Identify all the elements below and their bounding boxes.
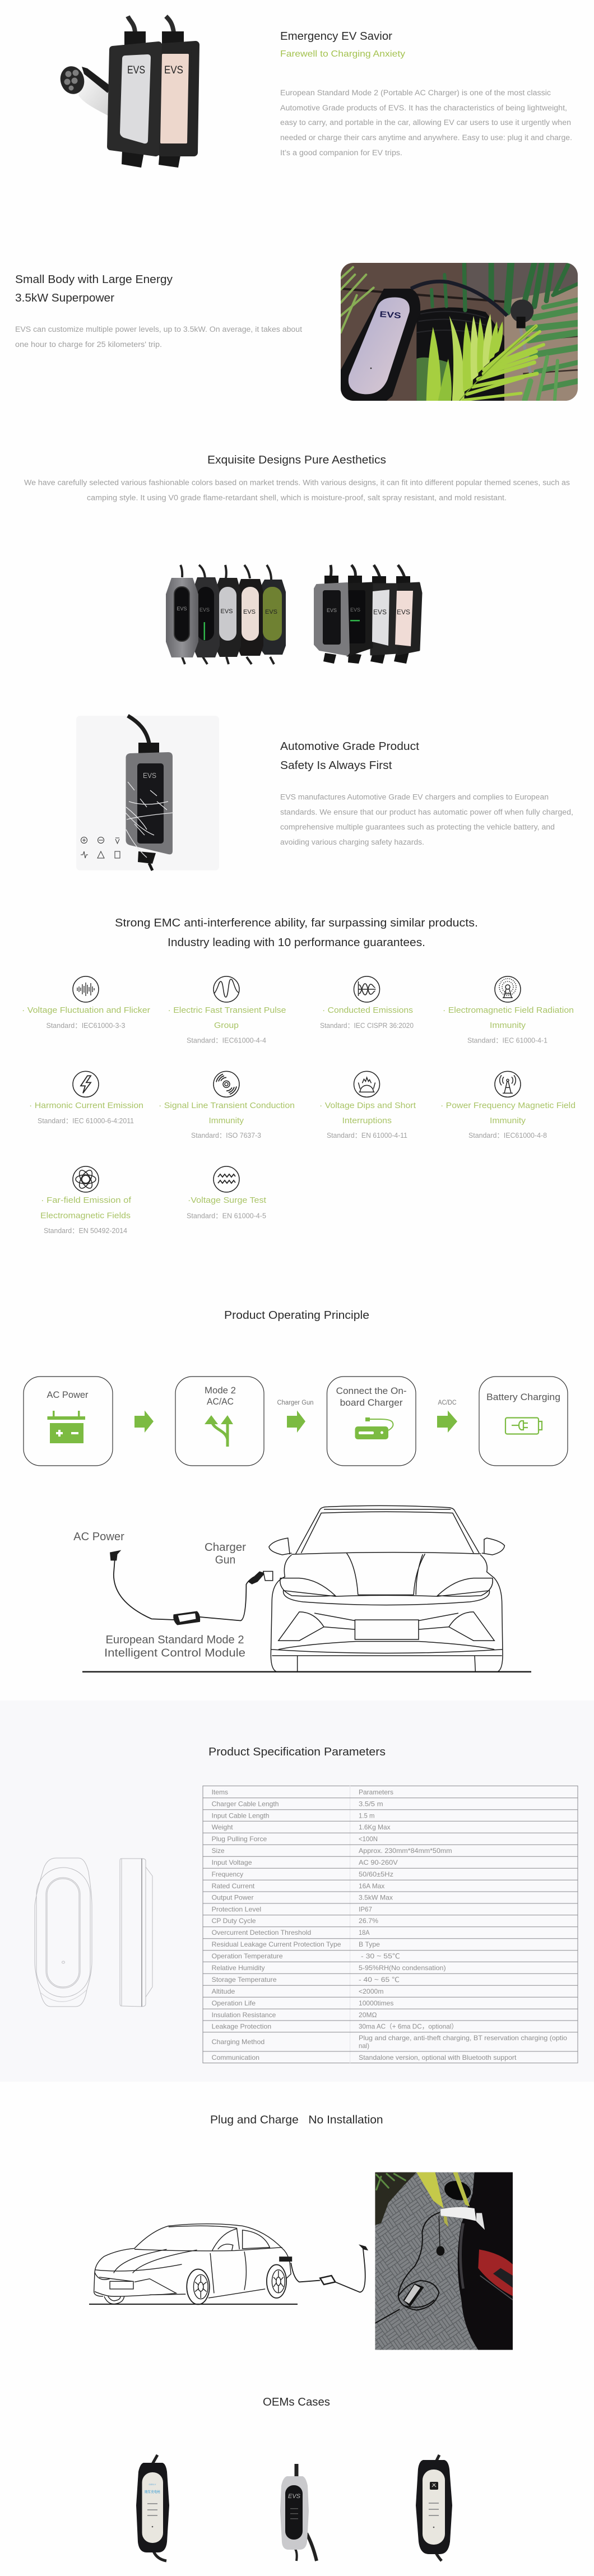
panel: OEMs cases <box>136 2396 452 2561</box>
arrow <box>437 1410 457 1433</box>
heading: OEMs Cases <box>263 2396 330 2408</box>
heading <box>15 274 173 304</box>
heading: Exquisite Designs Pure Aesthetics <box>207 454 386 466</box>
paragraph: standards. We ensure that our product has automatic power off when fully charged, <box>280 808 573 816</box>
table: specifications: 1.6Kg Max <box>359 1823 390 1831</box>
step: connect the on-board charger: board Charger <box>340 1398 403 1408</box>
image: two portable chargers with plug <box>57 16 196 168</box>
guarantee: signal line <box>159 1071 295 1139</box>
table: specifications: 10000times <box>359 1999 393 2007</box>
step: mode 2 <box>175 1377 264 1466</box>
table: specifications: <2000m <box>359 1987 383 1995</box>
image: four rectangular-panel chargers <box>314 565 421 664</box>
title line two: Immunity <box>490 1021 526 1030</box>
icon: split arrows <box>205 1415 233 1447</box>
heading: 3.5kW Superpower <box>15 292 114 304</box>
standard: Standard：EN 61000-4-5 <box>187 1212 266 1220</box>
step: mode 2: Mode 2 <box>205 1386 236 1396</box>
photo: charger among palm leaves: EVS <box>379 310 402 321</box>
table: specifications: 5-95%RH(No condensation) <box>359 1964 446 1972</box>
title line two: Immunity <box>208 1116 244 1125</box>
table: specifications: - 30 ~ 55℃ <box>361 1952 400 1960</box>
paragraph <box>280 89 572 157</box>
table: specifications: Standalone version, optional with Bluetooth support <box>359 2054 517 2061</box>
standard: Standard：IEC CISPR 36:2020 <box>320 1022 414 1030</box>
table: specifications: nal) <box>359 2042 369 2050</box>
label: control module: European Standard Mode 2 <box>105 1634 244 1646</box>
table: specifications: Approx. 230mm*84mm*50mm <box>359 1847 452 1855</box>
heading: Product Operating Principle <box>224 1309 369 1322</box>
paragraph <box>24 479 570 502</box>
icon: battery <box>47 1411 85 1443</box>
panel: small body large energy <box>15 263 578 401</box>
paragraph: needed or charge their cars anytime and anywhere. Easy to use: plug it and charge. <box>280 133 572 142</box>
table: specifications: CP Duty Cycle <box>212 1917 256 1925</box>
paragraph <box>15 325 302 349</box>
heading <box>115 917 478 949</box>
product: OEM charger silver <box>280 2464 317 2561</box>
paragraph: avoiding various charging safety hazards. <box>280 838 424 846</box>
table: specifications: <100N <box>359 1835 378 1843</box>
illustration: charging cable with control module <box>110 1550 273 1625</box>
step: battery charging: Battery Charging <box>486 1392 560 1402</box>
paragraph: It’s a good companion for EV trips. <box>280 149 402 157</box>
subheading: Farewell to Charging Anxiety <box>280 49 405 59</box>
icon: zigzag waves <box>214 1166 239 1192</box>
section background <box>0 1701 594 2082</box>
step: AC power: AC Power <box>47 1390 89 1400</box>
paragraph: comprehensive multiple guarantees such as protecting the vehicle battery, and <box>280 823 555 831</box>
drawing: charger front view <box>35 1858 92 2007</box>
icon: dome with flame <box>354 1071 380 1097</box>
heading: Small Body with Large Energy <box>15 274 173 286</box>
step: battery charging <box>479 1377 568 1466</box>
step: AC power <box>24 1377 113 1466</box>
icon: sine wave <box>214 976 239 1002</box>
label: AC power: AC Power <box>73 1531 124 1543</box>
paragraph: Automotive Grade products of EVS. It has the characteristics of being lightweight, <box>280 104 567 112</box>
table: specifications: AC 90-260V <box>359 1859 398 1866</box>
panel: EMC performance guarantees <box>22 917 576 1235</box>
standard: Standard：IEC61000-3-3 <box>46 1022 126 1030</box>
image: four rectangular-panel chargers: EVS <box>350 607 360 613</box>
table: specifications: Overcurrent Detection Threshold <box>212 1929 311 1936</box>
image: four rectangular-panel chargers: EVS <box>397 608 410 616</box>
heading: Emergency EV Savior <box>280 30 392 43</box>
panel: product operating principle <box>24 1309 568 1672</box>
product: OEM charger with logo <box>416 2455 452 2561</box>
table: specifications: Frequency <box>212 1870 243 1878</box>
step: connect the on-board charger <box>327 1377 416 1466</box>
guarantee: conducted emissions <box>320 976 414 1030</box>
table: specifications: Leakage Protection <box>212 2022 271 2030</box>
standard: Standard：IEC 61000-4-1 <box>467 1037 547 1045</box>
title: · Voltage Fluctuation and Flicker <box>22 1006 150 1015</box>
guarantee: harmonic current <box>29 1071 143 1125</box>
title line two: Immunity <box>490 1116 526 1125</box>
icon: antenna tower <box>495 1071 521 1097</box>
title: · Electromagnetic Field Radiation <box>443 1006 574 1015</box>
label: charger gun: Charger <box>205 1541 246 1554</box>
table: specifications: Plug and charge, anti-theft charging, BT reservation charging (optio <box>359 2034 567 2042</box>
table: specifications: Operation Life <box>212 1999 256 2007</box>
label: charger gun <box>205 1541 246 1566</box>
guarantee: power frequency <box>440 1071 576 1139</box>
table: specifications: Charging Method <box>212 2038 264 2046</box>
table: specifications: Insulation Resistance <box>212 2011 276 2019</box>
heading: Product Specification Parameters <box>208 1746 386 1758</box>
paragraph <box>280 793 573 846</box>
guarantee: field radiation immunity <box>443 976 574 1045</box>
title: · Conducted Emissions <box>322 1006 413 1015</box>
title: · Power Frequency Magnetic Field <box>440 1101 576 1110</box>
table: specifications: 16A Max <box>359 1882 384 1890</box>
standard: Standard：EN 50492-2014 <box>44 1227 127 1235</box>
ground line <box>82 1671 531 1672</box>
paragraph: easy to carry, and portable in the car, allowing EV car users to use it urgently when <box>280 118 571 127</box>
panel: automotive grade product <box>76 716 573 870</box>
table: specifications: Plug Pulling Force <box>212 1835 267 1843</box>
label: charger gun: Charger Gun <box>277 1400 314 1406</box>
table: specifications: B Type <box>359 1940 380 1948</box>
table: specifications: Weight <box>212 1823 233 1831</box>
arrow <box>134 1410 154 1433</box>
table: specifications: Protection Level <box>212 1906 261 1914</box>
title line two: Group <box>214 1021 239 1030</box>
title: · Harmonic Current Emission <box>29 1101 143 1110</box>
panel: product specification parameters <box>0 1701 594 2082</box>
guarantee: voltage fluctuation <box>22 976 150 1030</box>
table: specifications: Input Voltage <box>212 1859 252 1866</box>
table: specifications: Rated Current <box>212 1882 255 1890</box>
product: OEM charger black: 随车充电枪 <box>145 2490 160 2494</box>
icon: atom <box>73 1166 99 1192</box>
title: · Far-field Emission of <box>41 1196 132 1205</box>
table: specifications: - 40 ~ 65 ℃ <box>359 1976 400 1984</box>
image: two portable chargers with plug: EVS <box>164 64 183 76</box>
image: waterproof charger with certification icons <box>76 716 219 870</box>
guarantee: voltage surge <box>187 1166 267 1220</box>
title: · Electric Fast Transient Pulse <box>168 1006 286 1015</box>
heading: Safety Is Always First <box>280 759 392 772</box>
table: specifications: 18A <box>359 1929 370 1936</box>
icon: lightning bolt <box>73 1071 99 1097</box>
diagram: charger connected to car front <box>73 1505 531 1672</box>
ground line <box>89 2304 298 2305</box>
guarantee: far-field emission <box>40 1166 132 1235</box>
step: mode 2: AC/AC <box>207 1397 234 1407</box>
paragraph: one hour to charge for 25 kilometers' trip. <box>15 340 162 349</box>
heading <box>280 740 419 772</box>
table: specifications: 30ma AC（+ 6ma DC，optional） <box>359 2022 458 2030</box>
panel: exquisite designs <box>24 454 570 664</box>
table: specifications: 3.5/5 m <box>359 1800 383 1808</box>
title: · Signal Line Transient Conduction <box>159 1101 295 1110</box>
arrow <box>287 1410 305 1433</box>
product: OEM charger silver: EVS <box>288 2493 301 2500</box>
label: AC/DC: AC/DC <box>438 1400 456 1406</box>
label: control module <box>104 1634 245 1659</box>
image: five capsule-panel chargers: EVS <box>177 606 187 611</box>
standard: Standard：IEC61000-4-4 <box>187 1037 266 1045</box>
heading: Automotive Grade Product <box>280 740 419 753</box>
image: two portable chargers with plug: EVS <box>127 64 145 76</box>
label: control module: Intelligent Control Module <box>104 1647 245 1659</box>
paragraph: We have carefully selected various fashionable colors based on market trends. With various designs, it can fit into different popular themed scenes, such as <box>24 479 570 487</box>
image: five capsule-panel chargers: EVS <box>220 608 233 615</box>
image: five capsule-panel chargers: EVS <box>265 609 277 615</box>
table: specifications: Input Cable Length <box>212 1811 270 1819</box>
step: connect the on-board charger: Connect the On- <box>336 1386 407 1396</box>
standard: Standard：IEC 61000-6-4:2011 <box>38 1117 134 1125</box>
panel: emergency EV savior <box>57 16 572 168</box>
guarantee: voltage dips <box>319 1071 416 1139</box>
table: specifications: IP67 <box>359 1906 372 1914</box>
image: five capsule-panel chargers: EVS <box>199 607 210 613</box>
heading: Plug and Charge No Installation <box>210 2114 383 2126</box>
heading: Industry leading with 10 performance guarantees. <box>168 937 425 949</box>
table: specifications: 3.5kW Max <box>359 1893 393 1901</box>
table: specifications: Storage Temperature <box>212 1976 277 1984</box>
illustration: side view car with charger <box>94 2224 368 2304</box>
paragraph: European Standard Mode 2 (Portable AC Charger) is one of the most classic <box>280 89 551 97</box>
table: specifications: Relative Humidity <box>212 1964 265 1972</box>
illustration: car front line art <box>269 1505 504 1672</box>
icon: sound wave <box>73 976 99 1002</box>
table: specifications: Communication <box>212 2054 259 2061</box>
table: specifications: Charger Cable Length <box>212 1800 279 1808</box>
table: specifications: 26.7% <box>359 1917 378 1925</box>
paragraph: EVS manufactures Automotive Grade EV chargers and complies to European <box>280 793 549 801</box>
table: specifications: Output Power <box>212 1893 254 1901</box>
panel: plug and charge <box>89 2114 513 2350</box>
icon: two waves with axis <box>354 976 380 1002</box>
title: · Voltage Dips and Short <box>319 1101 416 1110</box>
table: specifications: 50/60±5Hz <box>359 1870 393 1878</box>
label: charger gun: Gun <box>215 1554 235 1566</box>
table: specifications <box>203 1786 578 2063</box>
table: specifications: Parameters <box>359 1788 393 1796</box>
table: specifications: Size <box>212 1847 225 1855</box>
product: OEM charger black <box>136 2455 169 2561</box>
table: specifications: Residual Leakage Current Protection Type <box>212 1940 341 1948</box>
image: waterproof charger with certification icons: EVS <box>143 771 156 780</box>
icon: battery with plug <box>505 1418 542 1434</box>
paragraph: camping style. It using V0 grade flame-retardant shell, which is moisture-proof, salt spray resistant, and mold resistant. <box>87 493 507 502</box>
image: five capsule-panel chargers: EVS <box>243 609 256 615</box>
title: ·Voltage Surge Test <box>188 1196 267 1205</box>
title line two: Electromagnetic Fields <box>40 1211 131 1221</box>
icon: radiating tower <box>495 976 521 1002</box>
drawing: charger side view <box>120 1859 152 2007</box>
product: OEM charger black: GEELY <box>148 2483 156 2486</box>
standard: Standard：ISO 7637-3 <box>191 1132 261 1139</box>
photo: charger among palm leaves <box>341 263 578 401</box>
icon: concentric arcs <box>214 1071 239 1097</box>
table: specifications: 20MΩ <box>359 2011 377 2019</box>
table: specifications: Altitude <box>212 1987 235 1995</box>
title line two: Interruptions <box>342 1116 392 1125</box>
paragraph: EVS can customize multiple power levels, up to 3.5kW. On average, it takes about <box>15 325 302 333</box>
heading: Strong EMC anti-interference ability, far surpassing similar products. <box>115 917 478 929</box>
table: specifications: Operation Temperature <box>212 1952 283 1960</box>
image: four rectangular-panel chargers: EVS <box>327 608 337 613</box>
image: five capsule-panel chargers <box>166 565 286 664</box>
guarantee: electric fast transient <box>168 976 286 1045</box>
standard: Standard：IEC61000-4-8 <box>468 1132 547 1139</box>
table: specifications: 1.5 m <box>359 1811 374 1819</box>
icon: on-board charger <box>355 1417 393 1439</box>
table: specifications: Items <box>212 1788 228 1796</box>
image: four rectangular-panel chargers: EVS <box>373 608 387 616</box>
photo: charger plugged into car <box>375 2172 513 2350</box>
standard: Standard：EN 61000-4-11 <box>327 1132 407 1139</box>
